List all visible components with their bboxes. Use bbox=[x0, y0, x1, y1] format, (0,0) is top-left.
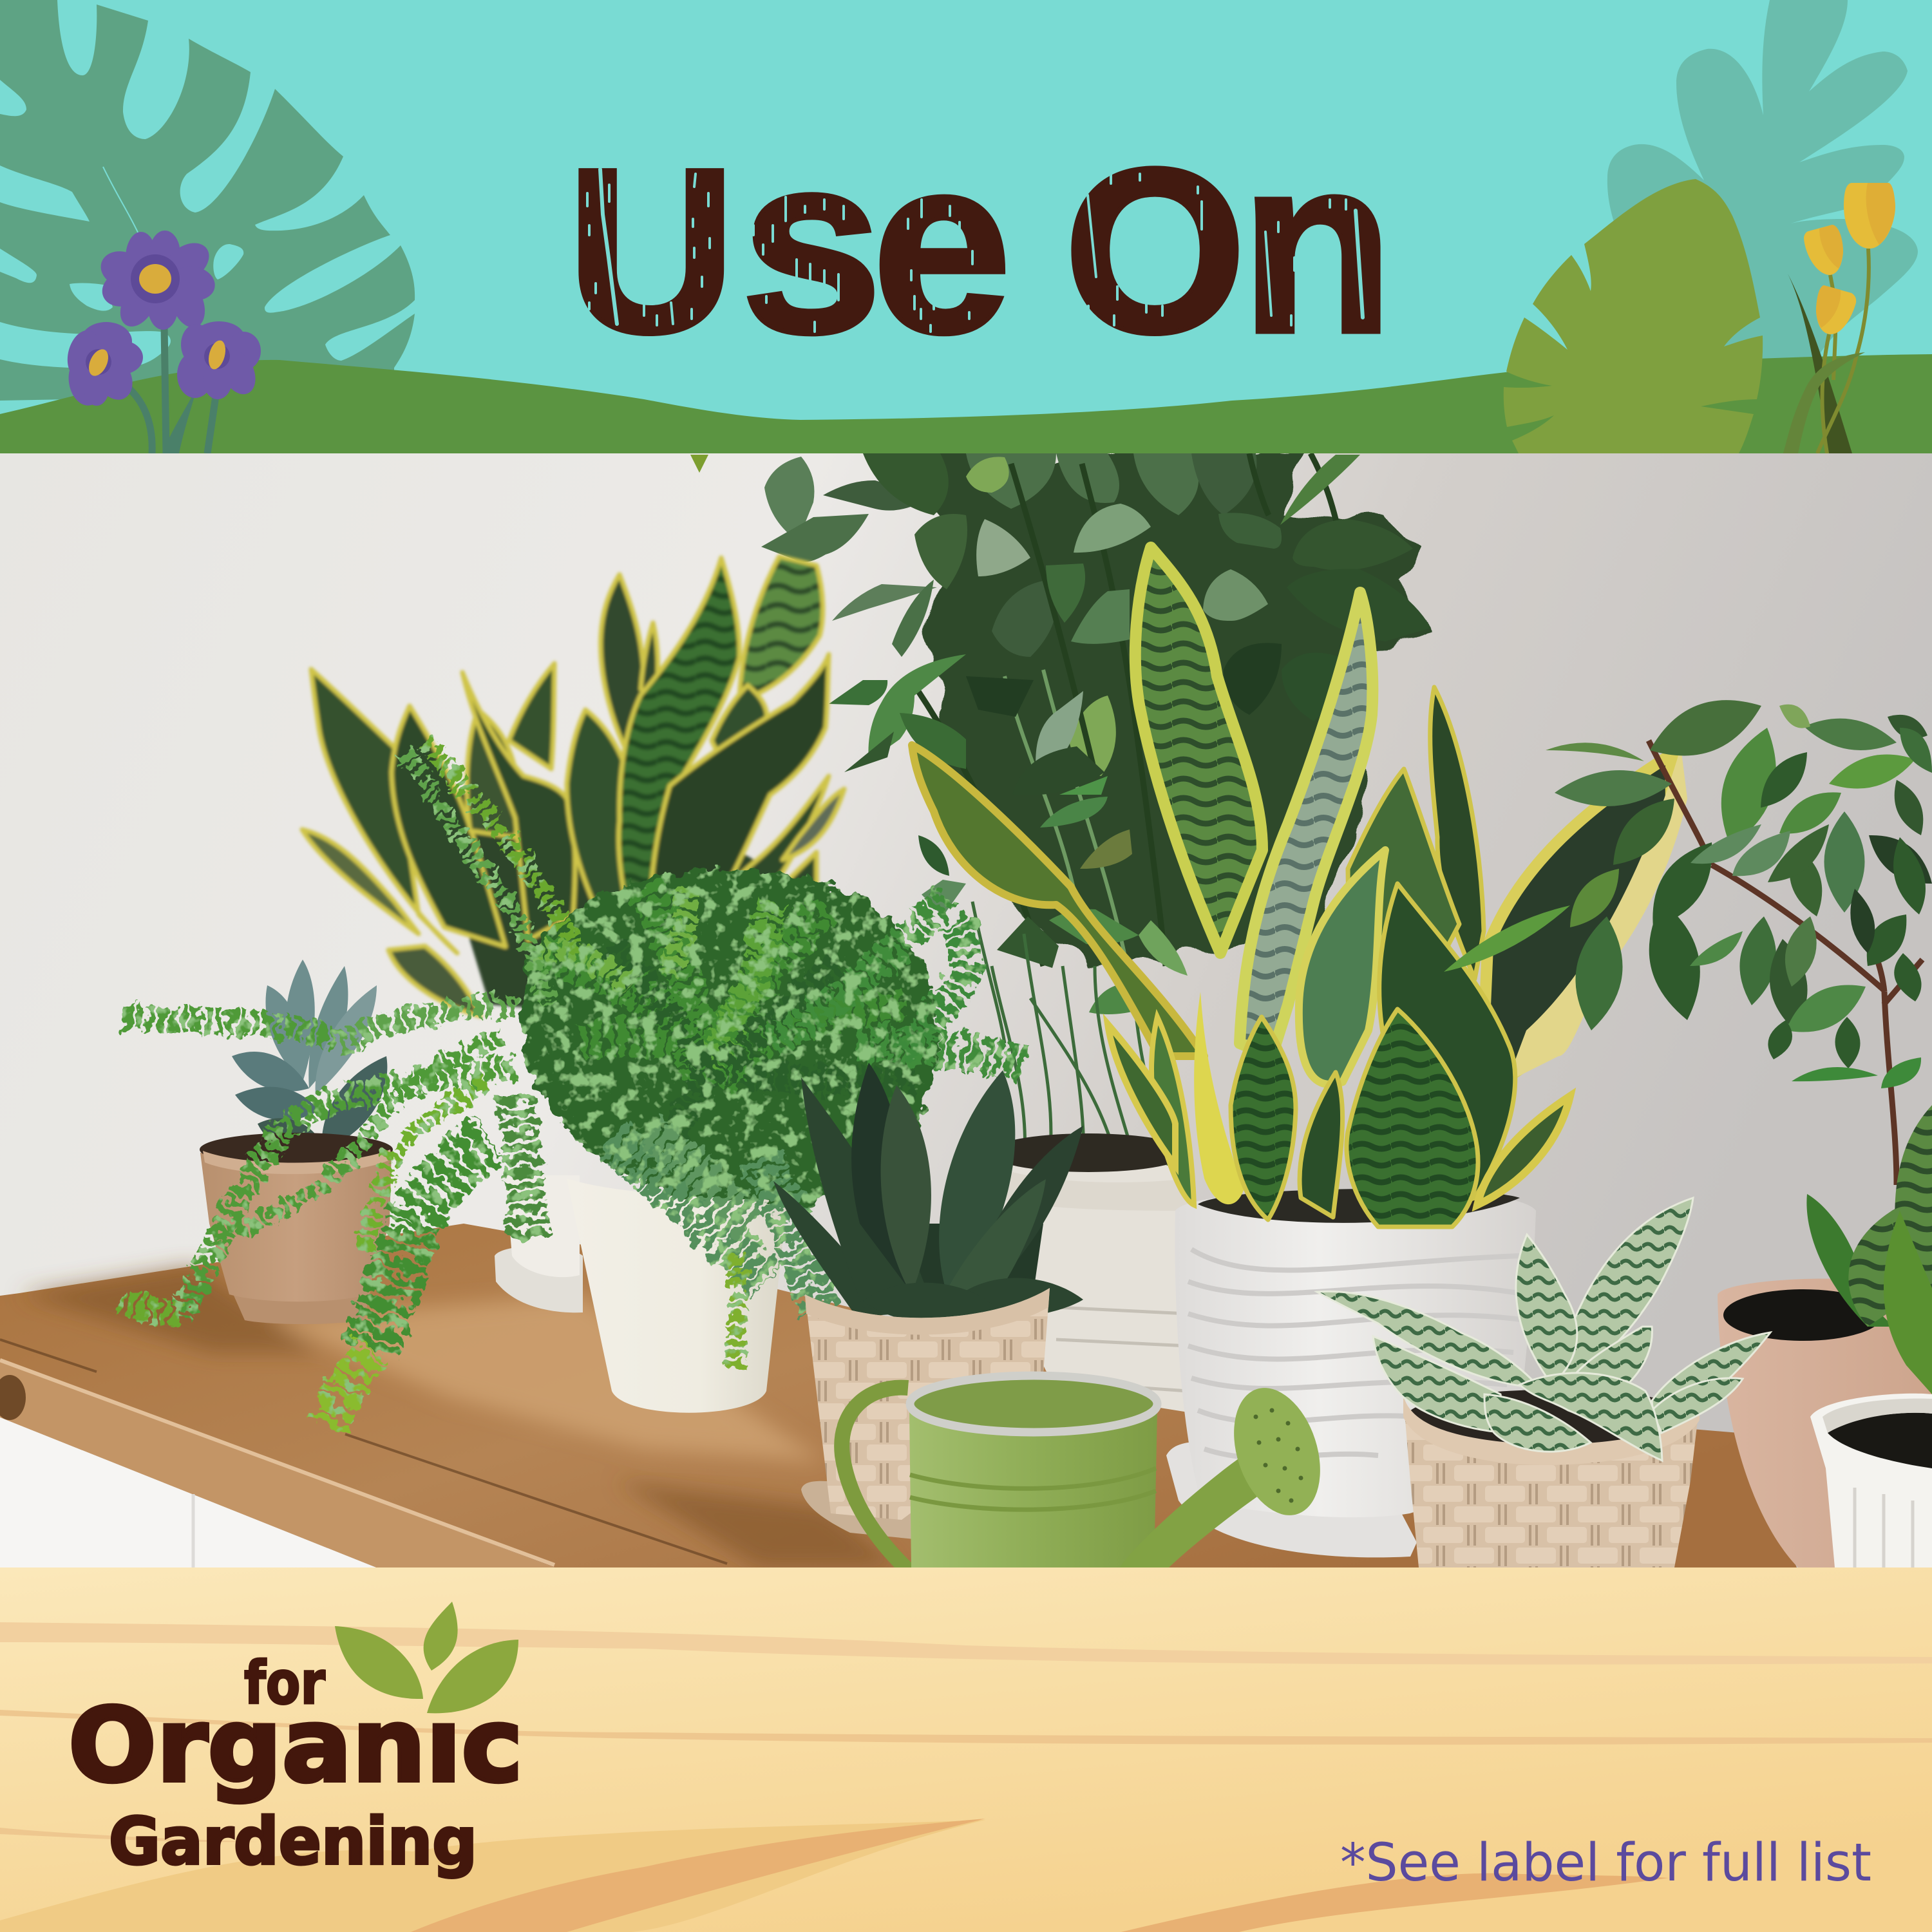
right back blade bbox=[1481, 753, 1673, 1095]
title: O bbox=[1064, 120, 1246, 382]
title: n bbox=[1240, 104, 1394, 385]
flower: left bbox=[62, 322, 143, 408]
blade: yellow broad bbox=[1194, 992, 1244, 1204]
logo word: Gardening: Gardening bbox=[109, 1803, 477, 1879]
flower: right bbox=[177, 321, 262, 400]
title: e bbox=[872, 104, 1012, 385]
pink pot bbox=[1718, 1279, 1932, 1567]
succulent and terracotta pot bbox=[200, 960, 393, 1324]
fern bbox=[119, 741, 1024, 1426]
white pot front right bbox=[1810, 1394, 1932, 1567]
title: U bbox=[567, 120, 736, 382]
rim bbox=[910, 1376, 1157, 1432]
footnote: *See label for full list bbox=[1340, 1833, 1871, 1893]
white pots behind fern bbox=[495, 1175, 583, 1312]
right front leaves bbox=[1806, 1105, 1932, 1394]
back leaf: teal bbox=[1607, 0, 1918, 359]
leaning blade bbox=[912, 745, 1204, 1056]
lighter mid blade bbox=[1348, 769, 1459, 1005]
logo leaves bbox=[335, 1602, 518, 1713]
green leaf bbox=[1504, 179, 1763, 453]
narrow dark blade bbox=[1430, 687, 1484, 979]
soil bbox=[1406, 1390, 1696, 1444]
spout bbox=[1120, 1455, 1265, 1567]
flower: large bbox=[96, 231, 218, 333]
body bbox=[909, 1410, 1157, 1567]
wood grain bands bbox=[0, 1622, 1932, 1932]
snake plant: right bbox=[912, 547, 1687, 1227]
tall cream pot bbox=[567, 1179, 789, 1413]
panel: footer bbox=[0, 1567, 1932, 1932]
panel: photo of houseplants bbox=[0, 452, 1932, 1571]
blade: green-white bbox=[1299, 850, 1385, 1084]
title: s bbox=[741, 101, 882, 386]
sprinkler head bbox=[1219, 1377, 1335, 1526]
wall bbox=[0, 453, 1932, 1567]
panel: header banner bbox=[0, 0, 1932, 453]
logo word: for: for bbox=[244, 1649, 326, 1718]
basket bbox=[1403, 1397, 1700, 1567]
handle bbox=[842, 1388, 909, 1571]
basket pot bbox=[801, 1288, 1050, 1539]
blade: big dark bbox=[1379, 884, 1515, 1224]
ficus tree bbox=[1444, 700, 1932, 1185]
tulips bbox=[1783, 183, 1895, 453]
big white back pot bbox=[989, 1133, 1188, 1412]
title bbox=[578, 166, 1381, 336]
aloe and basket pot bbox=[1317, 1198, 1770, 1567]
counter top bbox=[0, 1224, 1797, 1567]
tall blade: grey bbox=[1240, 592, 1372, 1056]
flowers bbox=[62, 231, 262, 453]
monstera leaf bbox=[0, 0, 415, 453]
aloe leaves bbox=[1317, 1198, 1770, 1461]
haworthia bbox=[773, 1063, 1083, 1325]
tall blade: speckled bbox=[1135, 547, 1262, 953]
white cabinet bbox=[0, 1417, 376, 1567]
logo word: Organic: Organic bbox=[68, 1687, 523, 1805]
big white ribbed pot bbox=[1166, 1189, 1536, 1557]
watering can bbox=[842, 1376, 1335, 1571]
hill bbox=[0, 354, 1932, 453]
logo: for Organic Gardening bbox=[68, 1602, 523, 1879]
snake plant: left bbox=[302, 556, 844, 1018]
back foliage plant bbox=[690, 452, 1433, 1179]
